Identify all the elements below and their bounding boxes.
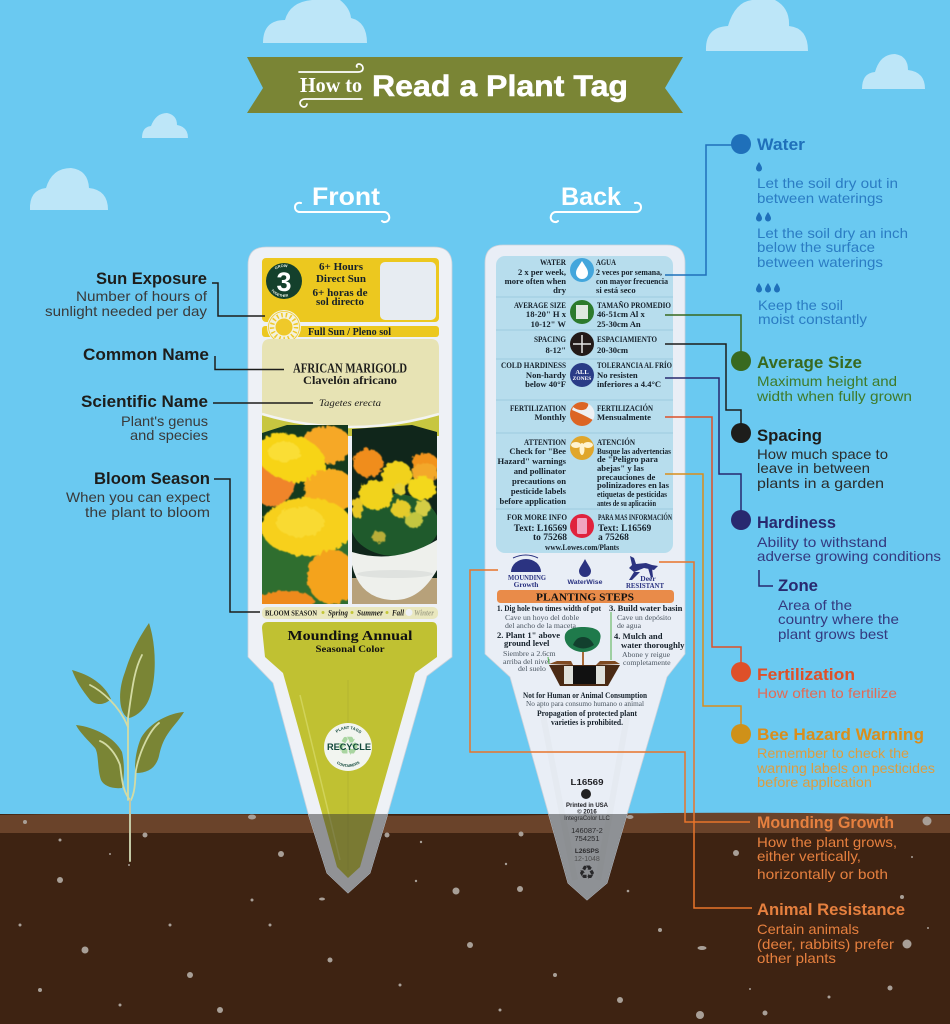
icon: mounding growth (508, 555, 546, 589)
icon: mounding growth: Growth (514, 580, 539, 589)
hardiness row: COLD HARDINESS (501, 360, 566, 370)
soil pebbles (18, 814, 932, 1019)
hardiness row: inferiores a 4.4°C (597, 379, 661, 389)
average size row: 10-12" W (531, 319, 566, 329)
more info row: www.Lowes.com/Plants (545, 542, 620, 552)
spacing row (534, 332, 657, 356)
label: scientific name (81, 393, 208, 443)
sub-callout: zone (759, 570, 899, 642)
planting steps (497, 590, 685, 727)
tag fine print: ♻ (578, 862, 596, 884)
callout: animal resistance: Certain animals (757, 921, 859, 937)
attention row: antes de su aplicación (597, 498, 656, 508)
water row: si está seco (596, 285, 636, 295)
planting steps: PLANTING STEPS (536, 592, 634, 604)
grow together badge: TOGETHER (272, 288, 288, 297)
callout: water: between waterings (757, 190, 883, 206)
callout: mounding growth: How the plant grows, (757, 834, 897, 850)
callout: average size: width when fully grown (756, 388, 912, 404)
title banner (247, 57, 683, 113)
annual panel: Seasonal Color (316, 645, 385, 655)
callout: average size (665, 315, 912, 404)
average size row: 25-30cm An (597, 319, 641, 329)
label: common name: Common Name (83, 346, 209, 364)
callout: water: moist constantly (758, 311, 867, 327)
average size row (514, 300, 671, 329)
attention row: precautions on (512, 476, 566, 486)
bloom season row: BLOOM SEASON (265, 610, 317, 618)
planting steps: completamente (623, 658, 671, 667)
callout: bee hazard warning: Remember to check the (757, 745, 909, 761)
callout: hardiness: Ability to withstand (757, 534, 887, 550)
recycle badge (324, 723, 372, 771)
heading: front (295, 183, 389, 222)
bloom season row: Fall (391, 608, 405, 618)
recycle badge: CONTAINERS (337, 761, 360, 767)
callout: bee hazard warning: Bee Hazard Warning (757, 726, 924, 744)
callout: mounding growth: either vertically, (757, 848, 861, 864)
care table (496, 256, 673, 553)
label: sun exposure: Number of hours of (76, 288, 207, 304)
callout: fertilization (665, 417, 897, 701)
attention row: ATENCIÓN (597, 437, 636, 447)
photo: marigold close-up (262, 425, 348, 604)
tag fine print: L26SPS (575, 848, 600, 855)
average size row: 18-20" H x (526, 309, 567, 319)
callout: fertilization: Fertilization (757, 666, 855, 684)
sun hours text: 6+ horas de (312, 288, 368, 299)
grow together badge (266, 263, 302, 299)
recycle badge: RECYCLE (327, 742, 371, 753)
callout: bee hazard warning (665, 474, 935, 790)
spacing row: SPACING (534, 334, 566, 344)
tag fine print: Printed in USA (566, 803, 609, 809)
hardiness row: No resisten (597, 370, 638, 380)
icon: water wise: WaterWise (568, 579, 603, 586)
recycle badge: ♻ (336, 732, 360, 762)
attention row: Busque las advertencias (597, 446, 672, 456)
full sun bar: Full Sun / Pleno sol (308, 327, 391, 338)
heading: back: Back (561, 183, 621, 211)
icon: water wise (568, 559, 603, 586)
planting steps: del suelo (518, 664, 546, 673)
icon: mounding growth: MOUNDING (508, 573, 546, 582)
more info row: a 75268 (598, 533, 629, 543)
connector: sun exposure (212, 283, 265, 316)
water row: AGUA (596, 257, 617, 267)
label: bloom season (66, 470, 210, 520)
spacing row: 20-30cm (597, 345, 629, 355)
sun hours text: sol directo (316, 297, 364, 308)
water row (505, 257, 669, 295)
sub-callout: zone: Zone (778, 577, 818, 595)
hardiness row: TOLERANCIA AL FRÍO (597, 360, 672, 370)
icon: deer resistant: Deer (640, 574, 656, 583)
planting steps: de agua (617, 621, 642, 630)
bloom season row (262, 607, 438, 619)
hardiness row: below 40°F (525, 379, 566, 389)
attention row: Check for "Bee (509, 446, 566, 456)
soil (0, 813, 950, 1024)
more info row (507, 512, 673, 552)
callout: animal resistance: other plants (757, 950, 836, 966)
label: bloom season: Bloom Season (94, 470, 210, 488)
spacing row: 8-12" (545, 345, 566, 355)
plant illustration (72, 623, 184, 861)
planting steps: varieties is prohibited. (551, 717, 623, 727)
icon: deer resistant (626, 556, 664, 590)
callout: animal resistance: (deer, rabbits) prefer (757, 936, 894, 952)
planting steps: Propagation of protected plant (537, 708, 637, 718)
planting steps: water thoroughly (621, 640, 685, 650)
bloom season row: Summer (357, 608, 384, 618)
sun hours text: Direct Sun (316, 274, 366, 285)
hardiness row: Non-hardy (526, 370, 567, 380)
icon: deer resistant: RESISTANT (626, 581, 664, 590)
fertilization row: Mensualmente (597, 412, 651, 422)
callout: water: Let the soil dry an inch (757, 225, 908, 241)
heading: back (551, 183, 641, 222)
sun hours text: 6+ Hours (319, 262, 363, 273)
tag fine print: © 2016 (577, 808, 597, 816)
read a plant tag: Read a Plant Tag (372, 70, 628, 103)
spacing row: ESPACIAMIENTO (597, 334, 657, 344)
front plant tag (248, 246, 452, 894)
average size row: TAMAÑO PROMEDIO (597, 300, 671, 310)
planting steps: 3. Build water basin (609, 603, 683, 613)
planting steps: No apto para consumo humano o animal (526, 699, 645, 708)
attention row: de "Peligro para (597, 454, 659, 464)
connector: scientific name (213, 402, 313, 404)
average size row: 46-51cm Al x (597, 309, 645, 319)
grow together badge: GROW (274, 264, 288, 270)
callout: average size: Maximum height and (757, 373, 897, 389)
more info row: Text: L16569 (514, 524, 567, 534)
callout: hardiness (665, 378, 941, 642)
average size row: AVERAGE SIZE (514, 300, 566, 310)
full sun bar (262, 326, 439, 338)
hardiness row: ALL (575, 369, 589, 376)
callout: animal resistance: Animal Resistance (757, 901, 905, 919)
sub-callout: zone: plant grows best (778, 626, 888, 642)
annual panel (262, 622, 437, 878)
more info row: PARA MAS INFORMACIÓN (598, 512, 673, 522)
planting steps: Cave un depósito (617, 613, 671, 622)
water row: more often when (505, 276, 566, 286)
water row: 2 veces por semana, (596, 267, 662, 277)
fertilization row: FERTILIZACIÓN (597, 403, 654, 413)
callout: average size: Average Size (757, 354, 862, 372)
callout: hardiness: adverse growing conditions (757, 548, 941, 564)
connector: bloom season (214, 479, 260, 612)
callout: mounding growth: horizontally or both (757, 866, 888, 882)
attention row: ATTENTION (524, 437, 567, 447)
callout: mounding growth (470, 570, 897, 882)
label: scientific name: and species (130, 427, 208, 443)
callout: water (665, 134, 908, 327)
recycle badge: PLANT TAGS (336, 726, 362, 734)
callout: spacing: How much space to (757, 446, 888, 462)
attention row (497, 436, 672, 508)
bloom season row: Spring (328, 608, 348, 618)
callout: fertilization: How often to fertilize (757, 685, 897, 701)
planting steps: del ancho de la maceta (505, 621, 577, 630)
clouds (30, 0, 925, 210)
label: scientific name: Scientific Name (81, 393, 208, 411)
callout: water: Let the soil dry out in (757, 175, 898, 191)
hardiness row: ZONES (573, 376, 591, 382)
label: bloom season: When you can expect (66, 489, 210, 505)
attention row: etiquetas de pesticidas (597, 489, 668, 499)
planting steps: Not for Human or Animal Consumption (523, 690, 647, 700)
tag fine print: IntegraColor LLC (564, 816, 611, 822)
soil shadow over front tag (308, 814, 388, 893)
planting steps: 4. Mulch and (614, 631, 663, 641)
water row: 2 x per week, (518, 267, 566, 277)
bloom season row: Winter (414, 608, 435, 618)
callout: water: between waterings (757, 254, 883, 270)
callout: spacing: plants in a garden (757, 475, 884, 491)
callout: spacing: Spacing (757, 427, 822, 445)
leaves (72, 623, 184, 788)
attention row: before application (500, 496, 566, 506)
heading: front: Front (312, 183, 381, 211)
water row: con mayor frecuencia (596, 276, 669, 286)
planting steps: Abone y reigue (622, 650, 671, 659)
tag fine print: 12-1048 (574, 856, 600, 863)
more info row: Text: L16569 (598, 524, 651, 534)
callout: hardiness: Hardiness (757, 514, 836, 532)
callout: bee hazard warning: before application (757, 774, 872, 790)
label: sun exposure (45, 270, 207, 319)
planting steps: 1. Dig hole two times width of pot (497, 603, 601, 613)
soil shadow over back tag (548, 814, 627, 900)
how to: How to (300, 73, 362, 97)
connector: common name (215, 356, 284, 370)
title flourish (299, 64, 363, 107)
photo: potted marigolds (351, 425, 439, 604)
label: sun exposure: sunlight needed per day (45, 303, 207, 319)
back plant tag (485, 245, 685, 900)
planting steps: Cave un hoyo del doble (505, 613, 580, 622)
label: scientific name: Plant's genus (121, 413, 208, 429)
sub-callout: zone: Area of the (778, 597, 852, 613)
attention row: precauciones de (597, 472, 656, 482)
sub-callout: zone: country where the (778, 611, 899, 627)
tag fine print: 754251 (574, 834, 600, 843)
planter bowl (352, 540, 437, 600)
attention row: pesticide labels (511, 486, 567, 496)
planting steps: ground level (504, 638, 550, 648)
water row: WATER (540, 257, 567, 267)
more info row: FOR MORE INFO (507, 512, 567, 522)
grow together badge: 3 (276, 267, 292, 297)
right callouts (470, 134, 941, 966)
sun requirement panel (262, 258, 439, 322)
tag fine print: L16569 (570, 777, 604, 787)
sun icon (267, 310, 301, 344)
planting steps: Siembre a 2.6cm (503, 649, 556, 658)
sun hours text (312, 262, 368, 308)
callout: water: below the surface (757, 239, 875, 255)
planting steps: 2. Plant 1" above (497, 630, 560, 640)
hardiness row (501, 360, 672, 389)
callout: spacing: leave in between (757, 460, 870, 476)
annual panel: Mounding Annual (288, 629, 413, 644)
fertilization row (510, 402, 654, 426)
planting steps: arriba del nivel (503, 657, 551, 666)
callout: water: Water (757, 136, 806, 154)
plant name panel: Tagetes erecta (319, 399, 381, 409)
tag fine print (564, 777, 611, 884)
fertilization row: FERTILIZATION (510, 403, 567, 413)
label: sun exposure: Sun Exposure (96, 270, 207, 288)
callout: mounding growth: Mounding Growth (757, 814, 894, 832)
more info row: to 75268 (533, 533, 567, 543)
left labels (45, 270, 313, 612)
stems (90, 655, 159, 861)
label: bloom season: the plant to bloom (85, 504, 210, 520)
water row: dry (553, 285, 567, 295)
planting diagram (548, 612, 620, 686)
callout: water: Keep the soil (758, 297, 843, 313)
plant name panel: Clavelón africano (303, 375, 397, 387)
attention row: abejas" y las (597, 463, 644, 473)
callout: bee hazard warning: warning labels on pesticides (756, 760, 935, 776)
attention row: and pollinator (514, 466, 566, 476)
callout: spacing (665, 344, 888, 491)
attention row: polinizadores en las (597, 480, 670, 490)
plant name panel (262, 339, 439, 436)
callout: animal resistance (659, 562, 905, 966)
fertilization row: Monthly (534, 412, 567, 422)
attention row: Hazard" warnings (497, 456, 567, 466)
plant name panel: AFRICAN MARIGOLD (293, 360, 407, 376)
tag fine print: 146087-2 (571, 826, 603, 835)
